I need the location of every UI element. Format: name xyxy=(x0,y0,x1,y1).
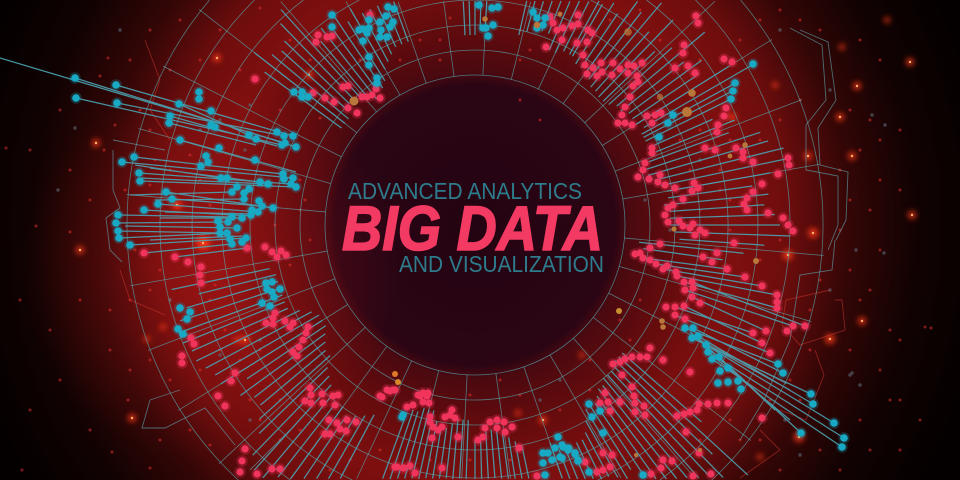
title block xyxy=(342,178,604,277)
heading: and visualization: AND VISUALIZATION xyxy=(399,251,604,277)
circuit outlines around the outer ring xyxy=(106,28,848,478)
red data points xyxy=(144,15,805,476)
rays: left fan xyxy=(0,58,296,257)
orange data points xyxy=(350,12,759,457)
heading: big data: BIG DATA xyxy=(342,194,603,264)
heading: advanced analytics: ADVANCED ANALYTICS xyxy=(348,178,582,204)
rays: lower right fan xyxy=(643,258,844,447)
left side red glow xyxy=(20,80,400,460)
radial grid: concentric rings and spokes xyxy=(126,0,824,480)
blue data points xyxy=(75,5,844,475)
